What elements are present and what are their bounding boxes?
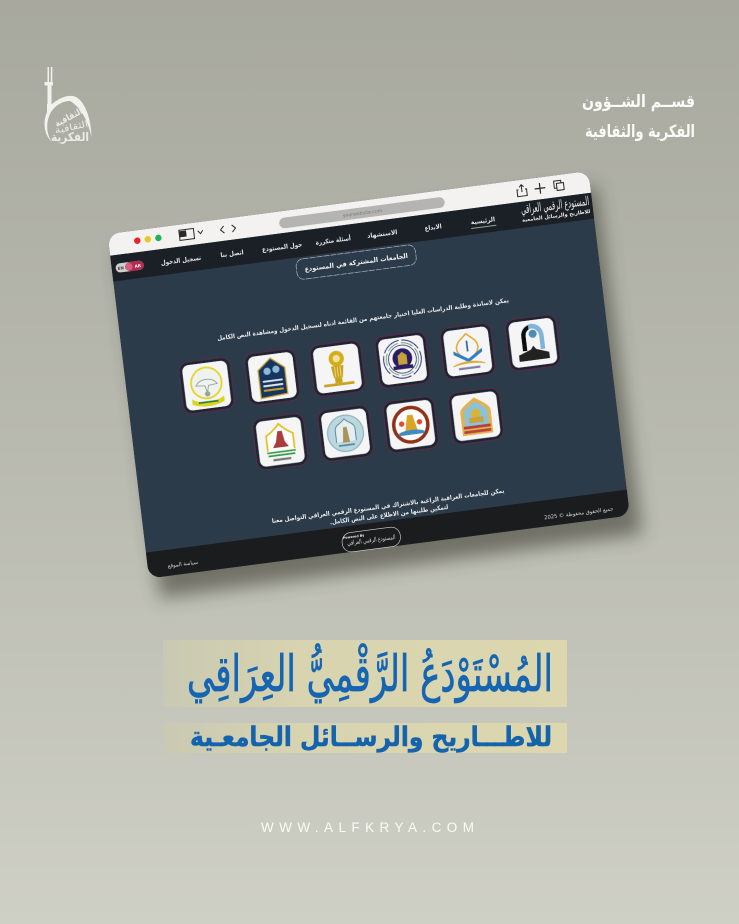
card 7: sky arch shrine [447, 387, 505, 445]
card 8: brown ring with tower [382, 396, 439, 454]
navigation menu: تسجيل الدخول [161, 255, 201, 267]
footer copyright: جميع الحقوق محفوظة © 2025 [544, 505, 614, 521]
address bar [279, 197, 445, 229]
contact note text: يمكن للجامعات العراقية الراغبة بالاشتراك في المستودع الرقمي العراقي التواصل معنا [271, 488, 505, 525]
icon: institution logo mosque: الفكرية [51, 130, 89, 144]
department heading [582, 92, 695, 142]
card 1: black arch with gear [504, 314, 561, 372]
powered by badge [341, 526, 401, 553]
window surface [108, 171, 630, 579]
title band [163, 640, 567, 707]
address bar: yourwebsite.com [342, 208, 383, 219]
icon: institution logo mosque [44, 67, 92, 144]
navigation menu: أسئلة متكررة [315, 233, 351, 247]
powered by badge: Powered By [343, 533, 365, 540]
window shadow [118, 186, 642, 598]
card 4: golden tower emblem [309, 339, 366, 398]
navigation menu: اتصل بنا [220, 249, 244, 259]
navigation menu: الاستشهاد [367, 229, 398, 240]
university logo cards [178, 314, 569, 479]
language toggle [115, 260, 144, 273]
subtitle band: للاطـــاريح والرســائل الجامعـية [190, 722, 552, 753]
instructions text: يمكن لاساتذة وطلبة الدراسات العليا اختيار جامعتهم من القائمة ادناه لتسجيل الدخول ومشاهدة النص الكامل [217, 297, 509, 342]
website address: WWW.ALFKRYA.COM [261, 820, 474, 835]
navigation menu: حول المستودع [262, 242, 303, 254]
repository logo in nav: للاطاريح والرسائل الجامعية [522, 209, 591, 224]
footer privacy link: سياسة الموقع [168, 560, 198, 570]
repository logo in nav: المستودع الرقمي العراقي [520, 194, 590, 218]
card 2: gold arch and blue book [439, 322, 496, 380]
browser toolbar left icons [179, 223, 236, 240]
navigation menu: الابداع [424, 223, 442, 232]
language toggle: EN [117, 265, 125, 271]
traffic light buttons [134, 234, 162, 244]
repository logo in nav [520, 194, 591, 224]
title band: المُسْتَوْدَعُ الرَّقْمِيُّ العِرَاقِي [187, 643, 553, 703]
card 3: purple rings seal [374, 331, 431, 389]
navigation menu [160, 214, 496, 270]
contact note text: لتمكين طلبتها من الاطلاع على النص الكامل. [330, 504, 449, 526]
icon: institution logo mosque: الثقافية [53, 107, 85, 130]
icon: institution logo mosque: الثقافية [54, 120, 89, 136]
language toggle: AR [134, 263, 142, 269]
card 9: pale blue circle [317, 404, 374, 462]
powered by badge: المستودع الرقمي العراقي [347, 534, 396, 547]
department heading: الفكرية والثقافية [585, 122, 695, 142]
section heading button [295, 244, 417, 280]
card 6: yellow ring with banner [178, 357, 235, 415]
browser window mockup [108, 171, 630, 579]
section heading button: الجامعات المشتركة في المستودع [304, 252, 408, 273]
navigation menu: الرئيسية [471, 216, 495, 226]
department heading: قســم الشــؤون [582, 92, 695, 112]
card 5: navy shield emblem [244, 348, 301, 406]
browser toolbar right icons [516, 179, 564, 197]
card 10: gold arch with red figure [252, 413, 309, 471]
